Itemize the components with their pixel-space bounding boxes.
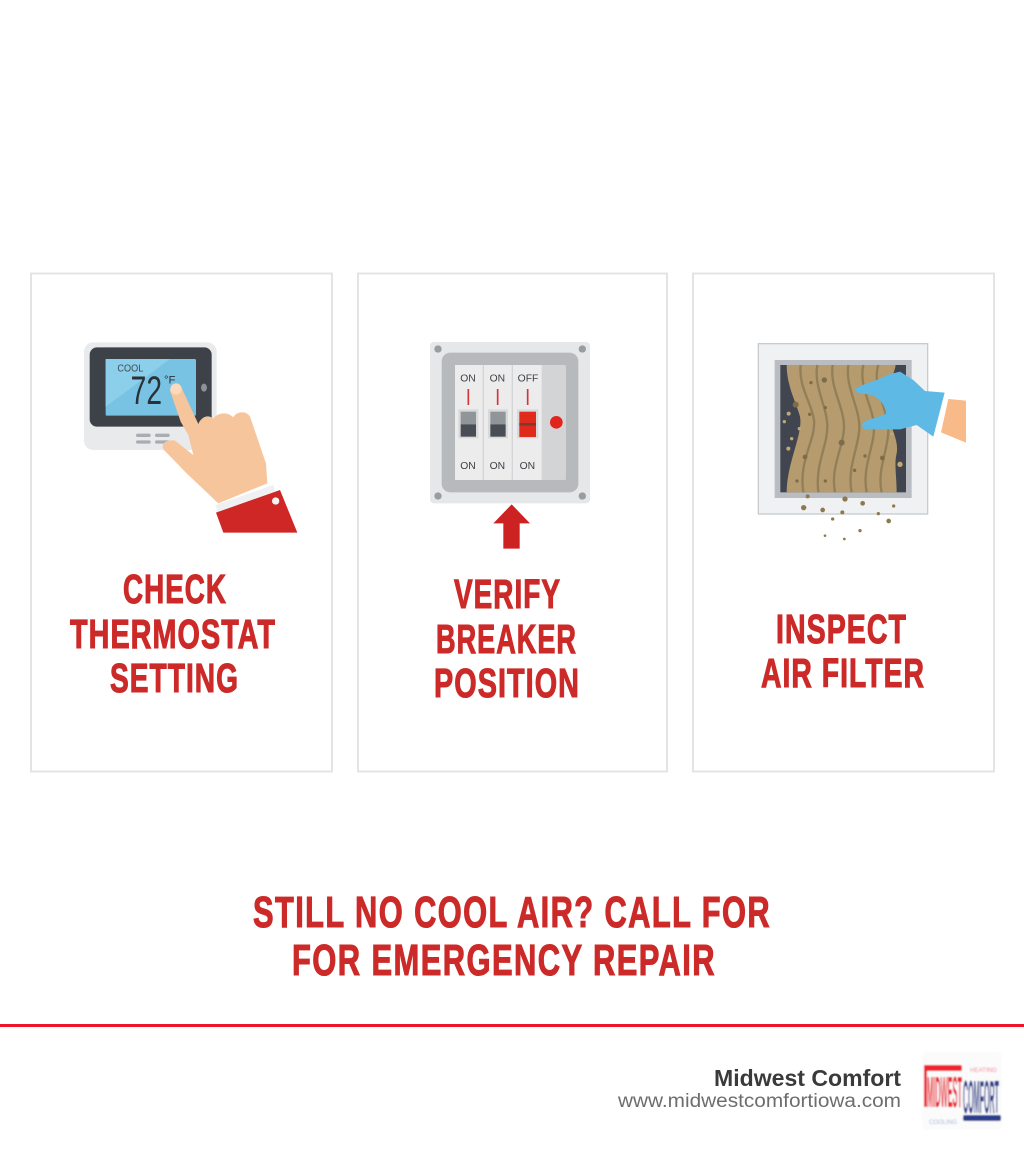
panel: check thermostat bbox=[31, 274, 332, 772]
logo: Midwest Comfort bbox=[922, 1052, 1002, 1130]
heading: verify breaker position: VERIFY bbox=[454, 571, 561, 617]
heading: verify breaker position bbox=[434, 571, 580, 706]
call to action: FOR EMERGENCY REPAIR bbox=[292, 936, 716, 985]
heading: check thermostat setting: SETTING bbox=[110, 655, 239, 701]
icon: thermostat with pointing hand: 72 bbox=[131, 369, 162, 413]
heading: inspect air filter: AIR FILTER bbox=[761, 650, 925, 696]
heading: check thermostat setting bbox=[70, 566, 276, 701]
footer brand text: www.midwestcomfortiowa.com bbox=[617, 1091, 901, 1112]
icon: thermostat with pointing hand: °F bbox=[164, 374, 176, 386]
icon: thermostat with pointing hand: COOL bbox=[117, 364, 144, 375]
icon: breaker box with arrow: ON bbox=[520, 461, 535, 472]
heading: verify breaker position: BREAKER bbox=[436, 616, 577, 662]
icon: breaker box with arrow: ON bbox=[490, 374, 505, 385]
icon: breaker box with arrow: ON bbox=[460, 374, 476, 385]
heading: check thermostat setting: CHECK bbox=[123, 566, 227, 612]
icon: breaker box with arrow: ON bbox=[490, 461, 505, 472]
icon: breaker box with arrow bbox=[430, 342, 590, 549]
call to action: STILL NO COOL AIR? CALL FOR bbox=[253, 888, 771, 937]
logo: Midwest Comfort: COOLING bbox=[929, 1120, 957, 1126]
footer brand text bbox=[617, 1065, 901, 1112]
icon: thermostat with pointing hand bbox=[84, 342, 297, 533]
heading: check thermostat setting: THERMOSTAT bbox=[70, 611, 276, 657]
heading: inspect air filter bbox=[761, 606, 925, 696]
panel: verify breaker bbox=[358, 274, 667, 772]
logo: Midwest Comfort: HEATING bbox=[970, 1068, 997, 1074]
icon: breaker box with arrow: ON bbox=[460, 461, 476, 472]
footer brand text: Midwest Comfort bbox=[714, 1065, 901, 1091]
panel: inspect air filter bbox=[693, 274, 994, 772]
icon: breaker box with arrow: OFF bbox=[518, 374, 538, 385]
call to action bbox=[253, 888, 771, 985]
icon: dirty air filter and gloved hand bbox=[758, 344, 966, 540]
heading: inspect air filter: INSPECT bbox=[776, 606, 907, 652]
heading: verify breaker position: POSITION bbox=[434, 660, 580, 706]
